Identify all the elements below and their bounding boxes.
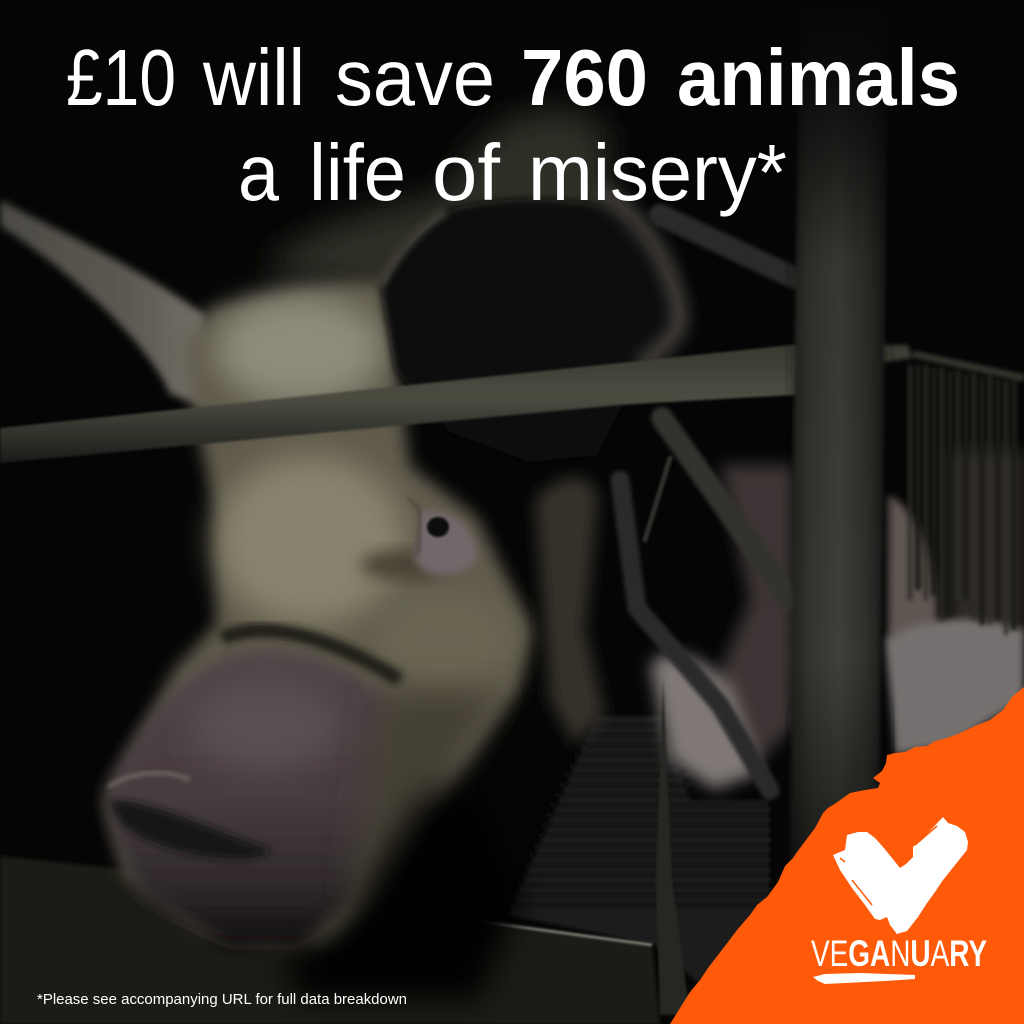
wordmark: VEGANUARY — [811, 932, 987, 974]
piglet head, right — [888, 495, 937, 640]
crate bars — [620, 215, 795, 1015]
diagonal bar — [662, 418, 790, 600]
right ear — [381, 199, 686, 462]
snout upper highlight — [190, 680, 340, 770]
forehead highlight — [215, 295, 385, 405]
curved lower bar — [620, 480, 770, 790]
back fence on the right — [873, 345, 1024, 635]
dark under bottom of head — [280, 780, 520, 1000]
vertical crate post — [790, 0, 888, 880]
headline line 1: save — [335, 33, 495, 122]
left ear — [0, 200, 215, 410]
brush slits — [840, 826, 937, 905]
upper back bar — [660, 215, 795, 278]
dim sow flank behind diagonal bars — [700, 465, 795, 780]
icon: brush heart — [833, 817, 968, 934]
fur beside snout — [350, 690, 505, 900]
headline line 2: of — [432, 128, 501, 217]
headline line 2: misery* — [528, 128, 787, 217]
dim wall behind fence — [950, 450, 1024, 640]
thin strut — [645, 458, 670, 540]
headline line 1: animals — [677, 33, 960, 122]
head base — [105, 282, 532, 950]
horizontal crate bar — [0, 343, 815, 463]
floor slab lower left — [0, 856, 660, 1024]
headline line 2: a — [238, 128, 279, 217]
headline — [66, 33, 960, 217]
bright piglet, centre — [650, 654, 760, 790]
ear rim fur — [600, 190, 680, 365]
piglet body, right — [885, 619, 1024, 755]
headline line 1: £10 — [66, 33, 176, 122]
crease above snout — [222, 631, 400, 680]
dim pig behind, top centre — [265, 110, 610, 300]
nostril rim highlight — [108, 773, 190, 787]
snout — [105, 650, 395, 948]
floor grating — [508, 716, 770, 985]
small vertical divider — [656, 680, 690, 1015]
leg — [535, 478, 605, 745]
ear left rim — [381, 212, 445, 285]
headline line 2: life — [309, 128, 406, 217]
headline line 2 — [238, 128, 787, 217]
cheek — [375, 590, 515, 690]
shaded eye socket — [360, 550, 450, 580]
pink piglets behind the bars — [650, 450, 1024, 790]
floor edge highlight — [432, 915, 652, 945]
mid face highlight — [215, 455, 405, 625]
headline line 1: will — [202, 33, 305, 122]
brush underline — [813, 973, 915, 984]
headline line 1 — [66, 33, 960, 122]
orange brush corner panel — [670, 687, 1024, 1024]
headline line 1: 760 — [521, 33, 648, 122]
footnote: *Please see accompanying URL for full data breakdown — [37, 992, 407, 1008]
post fade — [785, 0, 895, 880]
logo: Veganuary — [811, 817, 987, 984]
eye — [408, 498, 478, 575]
nostril — [110, 800, 270, 859]
